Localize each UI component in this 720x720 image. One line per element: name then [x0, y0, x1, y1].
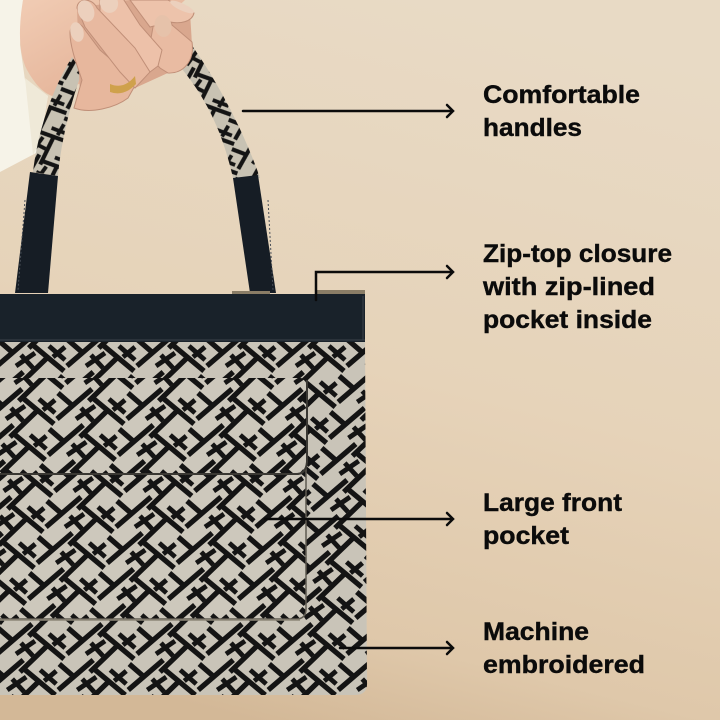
- label: large front pocket: pocket: [483, 522, 570, 550]
- icon: sleeve: [0, 0, 48, 172]
- finger: top: [130, 0, 194, 27]
- label: zip-top closure: [482, 240, 672, 334]
- label: machine embroidered: Machine: [483, 618, 589, 646]
- arrow: handles: [243, 105, 453, 117]
- label: machine embroidered: embroidered: [483, 651, 645, 679]
- nails: [68, 0, 195, 43]
- label: zip-top closure: pocket inside: [483, 306, 652, 334]
- finger: middle: [100, 0, 162, 72]
- label: large front pocket: [483, 489, 623, 550]
- arrow: front pocket: [265, 513, 453, 525]
- finger: lowest with ring: [70, 24, 137, 110]
- label: comfortable handles: [483, 81, 640, 142]
- finger: index: [77, 0, 150, 88]
- bag handle: leather: [15, 172, 276, 293]
- label: comfortable handles: handles: [483, 114, 582, 142]
- leather band: [0, 294, 365, 342]
- ring: [110, 76, 136, 93]
- hand base: [77, 0, 192, 100]
- hand: [68, 0, 195, 110]
- product photo: handbag: [0, 0, 367, 695]
- label: zip-top closure: with zip-lined: [482, 273, 655, 301]
- front pocket: [0, 378, 307, 620]
- icon: palm: [20, 0, 185, 96]
- label: zip-top closure: Zip-top closure: [483, 240, 672, 268]
- arrow: embroidery: [340, 642, 453, 654]
- label: large front pocket: Large front: [483, 489, 623, 517]
- thumb: [148, 15, 192, 73]
- zip top: [232, 290, 365, 294]
- bag body: [0, 342, 367, 695]
- arrow: zip-top closure: [316, 266, 453, 300]
- label: machine embroidered: [483, 618, 645, 679]
- label: comfortable handles: Comfortable: [483, 81, 640, 109]
- bag handle: fabric: [33, 18, 260, 178]
